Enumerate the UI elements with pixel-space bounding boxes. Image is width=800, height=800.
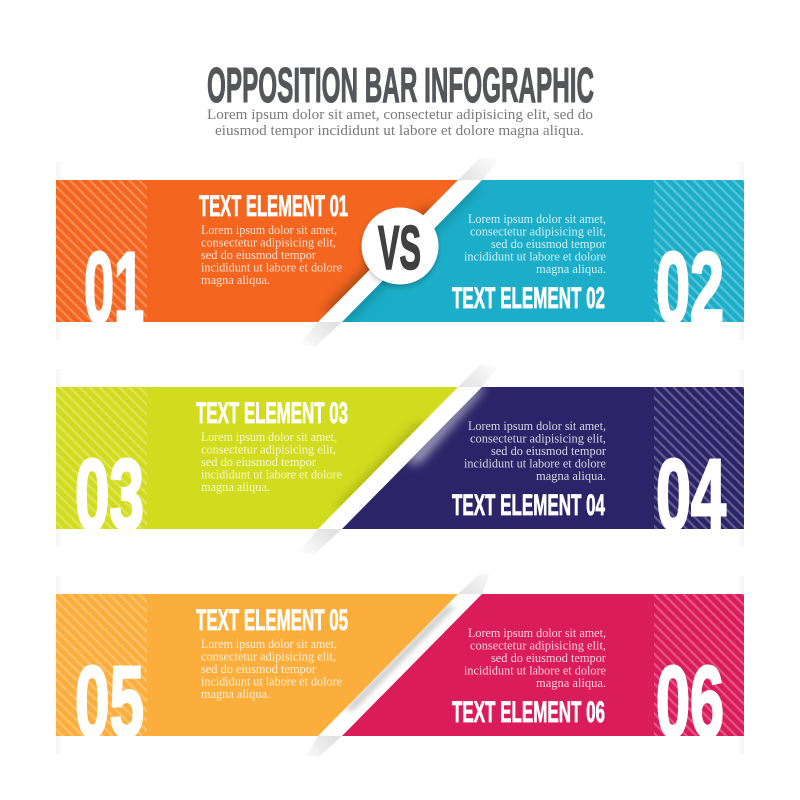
subtitle: Lorem ipsum dolor sit amet, consectetur adipisicing elit, sed do [207,107,593,123]
panel: option 01 [56,180,458,322]
body 06 [464,626,606,690]
body 05: magna aliqua. [201,687,270,701]
body 06: consectetur adipisicing elit, [470,638,606,652]
band shadow [344,606,456,710]
panel: option 02 [342,180,744,322]
heading 04: TEXT ELEMENT 04 [452,489,605,522]
number 05: 05 [75,646,144,758]
body 05: Lorem ipsum dolor sit amet, [201,637,337,651]
body 02: incididunt ut labore et dolore [464,250,606,264]
body 04: magna aliqua. [536,469,606,483]
number 01: 01 [84,232,144,344]
body 03: consectetur adipisicing elit, [201,442,336,456]
subtitle [207,107,593,139]
body 03: Lorem ipsum dolor sit amet, [201,430,337,444]
body 05: sed do eiusmod tempor [201,662,316,676]
body 05 [201,637,342,701]
subtitle: eiusmod tempor incididunt ut labore et dolore magna aliqua. [215,123,584,139]
body 01: consectetur adipisicing elit, [201,236,336,250]
body 03: sed do eiusmod tempor [201,455,316,469]
heading 02: TEXT ELEMENT 02 [452,282,605,315]
panel: option 05 [56,594,458,758]
bar outer shadow [56,574,744,756]
bar outer shadow [56,158,744,346]
body 02: Lorem ipsum dolor sit amet, [468,212,606,226]
heading 03: TEXT ELEMENT 03 [196,397,348,430]
body 03: magna aliqua. [201,480,270,494]
body 06: incididunt ut labore et dolore [464,664,606,678]
body 06: sed do eiusmod tempor [491,651,606,665]
panel: option 04 [342,387,744,529]
body 01: sed do eiusmod tempor [201,248,316,262]
body 05: incididunt ut labore et dolore [201,674,342,688]
panel: option 06 [342,594,744,758]
body 01: incididunt ut labore et dolore [201,260,342,274]
body 06: Lorem ipsum dolor sit amet, [468,626,606,640]
body 05: consectetur adipisicing elit, [201,650,336,664]
body 01: Lorem ipsum dolor sit amet, [201,223,337,237]
body 03: incididunt ut labore et dolore [201,468,342,482]
panel: row 2 [56,365,744,553]
VS badge [362,208,438,287]
VS badge: VS [378,214,421,283]
body 04: sed do eiusmod tempor [491,444,606,458]
body 03 [201,430,342,494]
body 02 [464,212,606,276]
body 01 [201,223,342,287]
heading 05: TEXT ELEMENT 05 [196,604,348,637]
body 04: incididunt ut labore et dolore [464,456,606,470]
bar outer shadow [56,365,744,553]
number 03: 03 [75,439,144,551]
heading 06: TEXT ELEMENT 06 [452,696,605,729]
number 04: 04 [656,439,726,551]
body 02: magna aliqua. [536,262,606,276]
body 04: Lorem ipsum dolor sit amet, [468,419,606,433]
body 04 [464,419,606,483]
panel: row 1 [56,158,744,346]
number 02: 02 [656,232,724,344]
panel: row 3 [56,574,744,758]
body 06: magna aliqua. [536,676,606,690]
body 04: consectetur adipisicing elit, [470,432,606,446]
number 06: 06 [656,646,724,758]
panel: option 03 [56,387,458,529]
body 02: consectetur adipisicing elit, [470,224,606,238]
body 01: magna aliqua. [201,273,270,287]
body 02: sed do eiusmod tempor [491,237,606,251]
heading 01: TEXT ELEMENT 01 [199,190,348,223]
